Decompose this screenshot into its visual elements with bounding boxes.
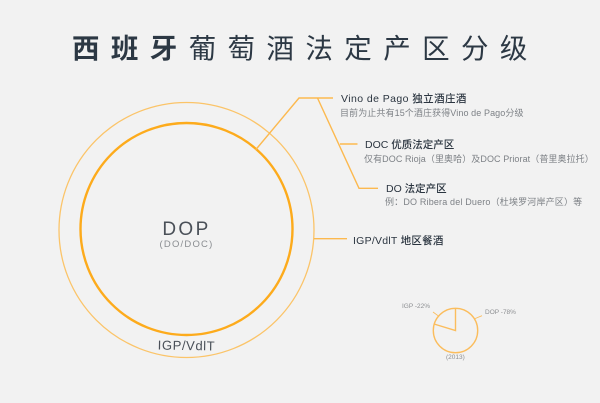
title: 西班牙葡萄酒法定产区分级 — [72, 33, 539, 64]
DOC note: 仅有DOC Rioja（里奥哈）及DOC Priorat（普里奥拉托） — [364, 154, 594, 164]
Vino de Pago heading: Vino de Pago 独立酒庄酒 — [341, 93, 467, 105]
leader: DOC and DO — [318, 98, 378, 188]
inner circle: DOP — [80, 123, 292, 335]
pie label: DOP: DOP -78% — [485, 309, 516, 316]
IGP/VdlT heading: IGP/VdlT 地区餐酒 — [353, 235, 444, 247]
leader: Vino de Pago — [256, 98, 333, 150]
DO/DOC sublabel: (DO/DOC) — [160, 239, 213, 250]
DOC heading: DOC 优质法定产区 — [365, 139, 454, 151]
pie label: year: (2013) — [446, 354, 465, 361]
pie label: IGP: IGP -22% — [402, 303, 430, 310]
IGP/VdlT curved label: IGP/VdlT — [158, 337, 215, 354]
Vino de Pago note: 目前为止共有15个酒庄获得Vino de Pago分级 — [340, 108, 524, 118]
DOP label: DOP — [162, 219, 211, 240]
leader: IGP/VdlT — [314, 238, 347, 240]
pie chart — [433, 308, 482, 353]
outer circle: IGP/VdlT — [59, 102, 314, 358]
DO heading: DO 法定产区 — [386, 183, 447, 195]
DO note: 例：DO Ribera del Duero（杜埃罗河岸产区）等 — [385, 197, 582, 207]
